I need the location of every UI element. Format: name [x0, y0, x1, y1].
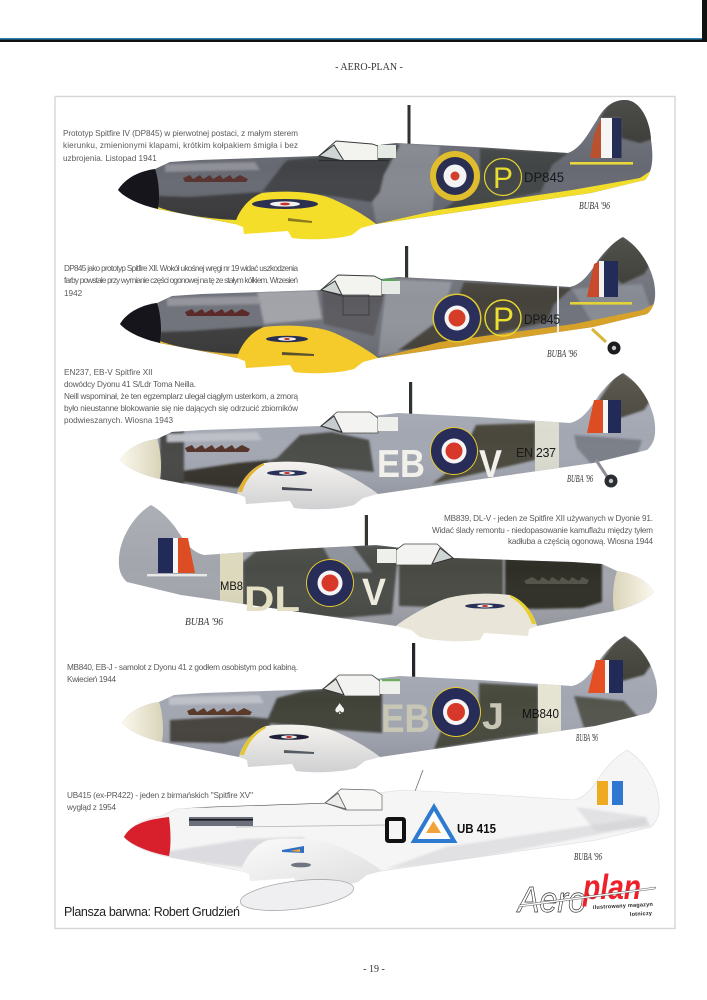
- plane 3: EN237 EB-V: BUBA '96: [567, 474, 593, 485]
- caption 3: dowódcy Dyonu 41 S/Ldr Toma Neilla.: [64, 380, 196, 389]
- logo: Aeroplan: Aero: [516, 879, 586, 920]
- caption 3: Neill wspominał, że ten egzemplarz ulegał ciągłym usterkom, a zmorą: [64, 392, 298, 401]
- plane 6: UB415 Burmese Spitfire XV: [124, 750, 659, 916]
- plane 3: EN237 EB-V: EN 237: [516, 446, 556, 460]
- plane 3: EN237 EB-V: [120, 373, 656, 510]
- caption 4: kadłuba a częścią ogonową. Wiosna 1944: [508, 537, 653, 546]
- caption 4: MB839, DL-V - jeden ze Spitfire XII używanych w Dyonie 91.: [444, 514, 653, 523]
- panel: colour plate frame: [55, 96, 675, 928]
- plane 2: DP845 as Spitfire XII prototype: DP845: [524, 312, 560, 327]
- plane 2: DP845 as Spitfire XII prototype: BUBA '96: [547, 349, 577, 360]
- plane 2: DP845 as Spitfire XII prototype: P: [493, 301, 514, 337]
- plane 3: EN237 EB-V: EB: [377, 443, 425, 486]
- plane 1: Spitfire IV DP845: DP845: [524, 170, 564, 185]
- top dark page edge: [0, 0, 707, 42]
- artist credit: Plansza barwna: Robert Grudzień: [64, 905, 240, 919]
- caption 2: 1942: [64, 289, 83, 298]
- plane 1: Spitfire IV DP845: P: [493, 162, 513, 195]
- caption 4: Widać ślady remontu - niedopasowanie kamuflażu między tyłem: [432, 526, 653, 535]
- plane 2: DP845 as Spitfire XII prototype: [120, 237, 656, 374]
- plane 4: MB839 DL-V (facing right): BUBA '96: [185, 617, 223, 628]
- caption 4: [432, 514, 653, 546]
- caption 3: podwieszanych. Wiosna 1943: [64, 416, 173, 425]
- plane 3: EN237 EB-V: V: [479, 443, 502, 486]
- caption 1: [63, 129, 298, 163]
- caption 2: farby powstałe przy wymianie części ogonowej na tę ze stałym kółkiem. Wrzesień: [64, 276, 298, 285]
- plane 4: MB839 DL-V (facing right): MB8: [220, 579, 243, 593]
- caption 5: [67, 663, 298, 684]
- logo: Aeroplan: plan: [582, 868, 641, 907]
- logo: Aeroplan: lotniczy: [630, 911, 653, 918]
- caption 1: uzbrojenia. Listopad 1941: [63, 154, 157, 163]
- caption 5: MB840, EB-J - samolot z Dyonu 41 z godłem osobistym pod kabiną.: [67, 663, 298, 672]
- caption 2: [64, 264, 298, 298]
- caption 6: UB415 (ex-PR422) - jeden z birmańskich "Spitfire XV": [67, 791, 253, 800]
- plane 1: Spitfire IV DP845: [118, 100, 652, 240]
- caption 3: EN237, EB-V Spitfire XII: [64, 368, 153, 377]
- plane 5: MB840 EB-J: [122, 636, 658, 772]
- caption 1: Prototyp Spitfire IV (DP845) w pierwotnej postaci, z małym sterem: [63, 129, 298, 138]
- caption 2: DP845 jako prototyp Spitfire XII. Wokół ukośnej wręgi nr 19 widać uszkodzenia: [64, 264, 298, 273]
- page running head: - AERO-PLAN -: [335, 62, 403, 73]
- caption 3: było nieustanne blokowanie się nie dających się odrzucić zbiorników: [64, 404, 298, 413]
- caption 6: [66, 791, 253, 812]
- plane 5: MB840 EB-J: ♠: [333, 700, 346, 718]
- page number: - 19 -: [363, 964, 385, 975]
- plane 5: MB840 EB-J: EB: [381, 697, 430, 741]
- plane 6: UB415 Burmese Spitfire XV: UB 415: [457, 822, 496, 836]
- caption 1: kierunku, zmienionymi klapami, krótkim kołpakiem śmigła i bez: [63, 141, 298, 150]
- plane 5: MB840 EB-J: MB840: [522, 707, 559, 721]
- logo: Aeroplan: [516, 868, 656, 920]
- plane 5: MB840 EB-J: J: [482, 696, 504, 737]
- plane 1: Spitfire IV DP845: BUBA '96: [579, 201, 610, 212]
- plane 5: MB840 EB-J: BUBA '96: [576, 733, 598, 744]
- plane 6: UB415 Burmese Spitfire XV: BUBA '96: [574, 852, 602, 863]
- plane 4: MB839 DL-V (facing right): V: [362, 572, 387, 614]
- plane 4: MB839 DL-V (facing right): DL: [244, 580, 300, 619]
- logo: Aeroplan: ilustrowany magazyn: [593, 902, 654, 911]
- caption 6: wygląd z 1954: [66, 803, 116, 812]
- plane 4: MB839 DL-V (facing right): [118, 505, 654, 642]
- caption 3: [64, 368, 298, 425]
- caption 5: Kwiecień 1944: [67, 675, 116, 684]
